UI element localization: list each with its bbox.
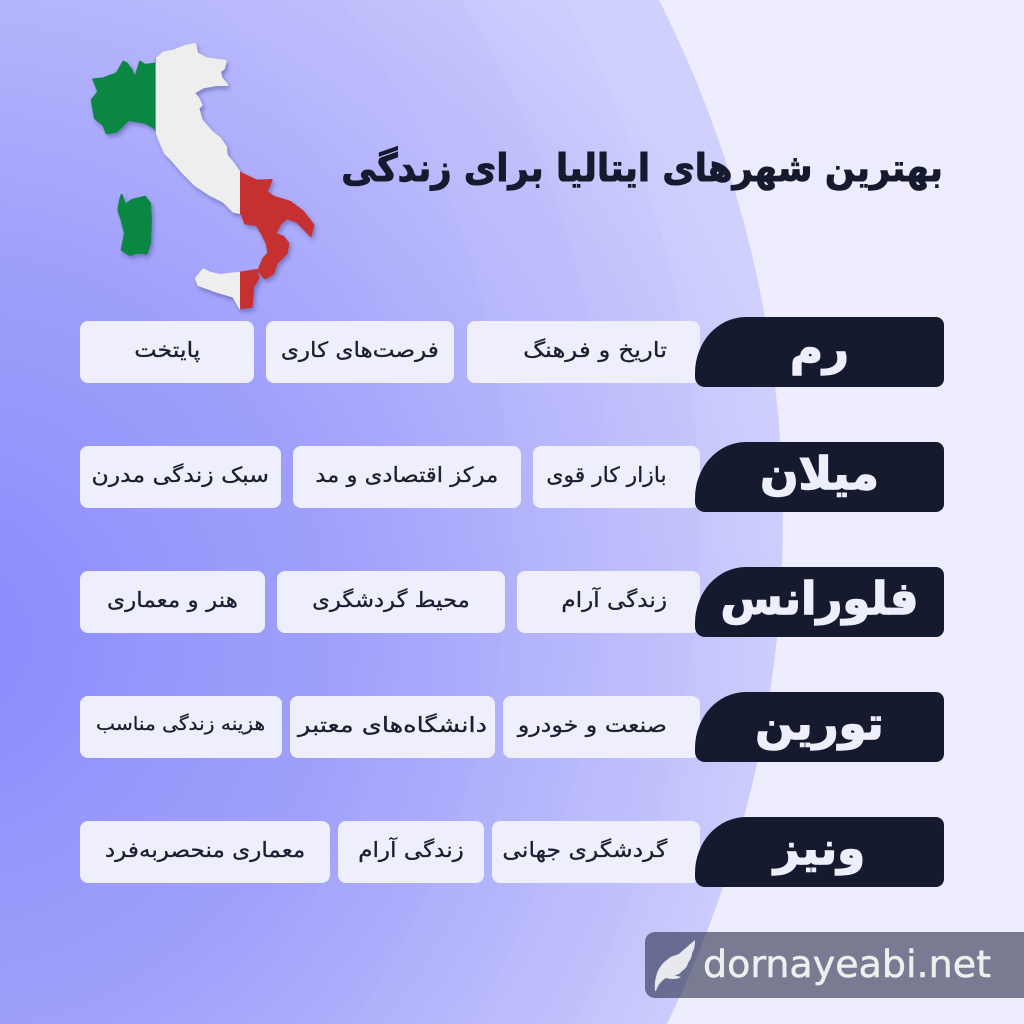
chip: unique architecture: معماری منحصربه‌فرد xyxy=(105,838,305,862)
chip: job opportunities xyxy=(266,321,454,383)
chip: affordable living: هزینه زندگی مناسب xyxy=(96,714,266,735)
brand text: dornayeabi.net xyxy=(703,943,991,986)
chip: modern lifestyle xyxy=(80,446,281,508)
chip: tourist environment xyxy=(277,571,505,633)
chip: history and culture xyxy=(467,321,700,383)
city label: Venice xyxy=(695,817,944,887)
city label: Rome xyxy=(695,317,944,387)
chip: industry and automotive: صنعت و خودرو xyxy=(518,713,667,737)
city label: Turin: تورین xyxy=(755,697,884,750)
watermark: dornayeabi.net xyxy=(645,932,1024,998)
city label: Florence: فلورانس xyxy=(721,572,918,625)
chip: calm life xyxy=(517,571,700,633)
row: Florence xyxy=(80,567,944,637)
chip: calm life xyxy=(338,821,484,883)
chip: global tourism xyxy=(492,821,700,883)
chip: calm life: زندگی آرام xyxy=(358,838,464,862)
chip: tourist environment: محیط گردشگری xyxy=(312,588,470,612)
chip: universities xyxy=(290,696,495,758)
row: Venice xyxy=(80,817,944,887)
chip: strong job market: بازار کار قوی xyxy=(547,463,667,487)
icon: feather wing xyxy=(655,940,695,991)
chip: unique architecture xyxy=(80,821,330,883)
chip: strong job market xyxy=(533,446,700,508)
chip: calm life: زندگی آرام xyxy=(561,588,667,612)
chip: art and architecture: هنر و معماری xyxy=(107,588,238,612)
chip: art and architecture xyxy=(80,571,265,633)
chip: economy and fashion: مرکز اقتصادی و مد xyxy=(315,463,499,487)
chip: job opportunities: فرصت‌های کاری xyxy=(281,338,439,362)
map of Italy in flag colours xyxy=(90,43,318,314)
chip: capital xyxy=(80,321,254,383)
row: Rome xyxy=(80,317,944,387)
city label: Milan xyxy=(695,442,944,512)
chip: affordable living xyxy=(80,696,282,758)
city label: Turin xyxy=(695,692,944,762)
row: Milan xyxy=(80,442,944,512)
chip: universities: دانشگاه‌های معتبر xyxy=(298,713,487,737)
city label: Rome: رم xyxy=(790,322,849,375)
chip: global tourism: گردشگری جهانی xyxy=(502,838,667,862)
city label: Milan: میلان xyxy=(760,447,879,500)
chip: modern lifestyle: سبک زندگی مدرن xyxy=(92,463,269,487)
row: Turin xyxy=(80,692,944,762)
chip: history and culture: تاریخ و فرهنگ xyxy=(523,338,667,362)
chip: capital: پایتخت xyxy=(134,338,200,362)
city label: Florence xyxy=(695,567,944,637)
title: بهترین شهرهای ایتالیا برای زندگی xyxy=(341,146,943,190)
city label: Venice: ونیز xyxy=(774,822,865,875)
chip: industry and automotive xyxy=(503,696,700,758)
chip: economy and fashion xyxy=(293,446,521,508)
